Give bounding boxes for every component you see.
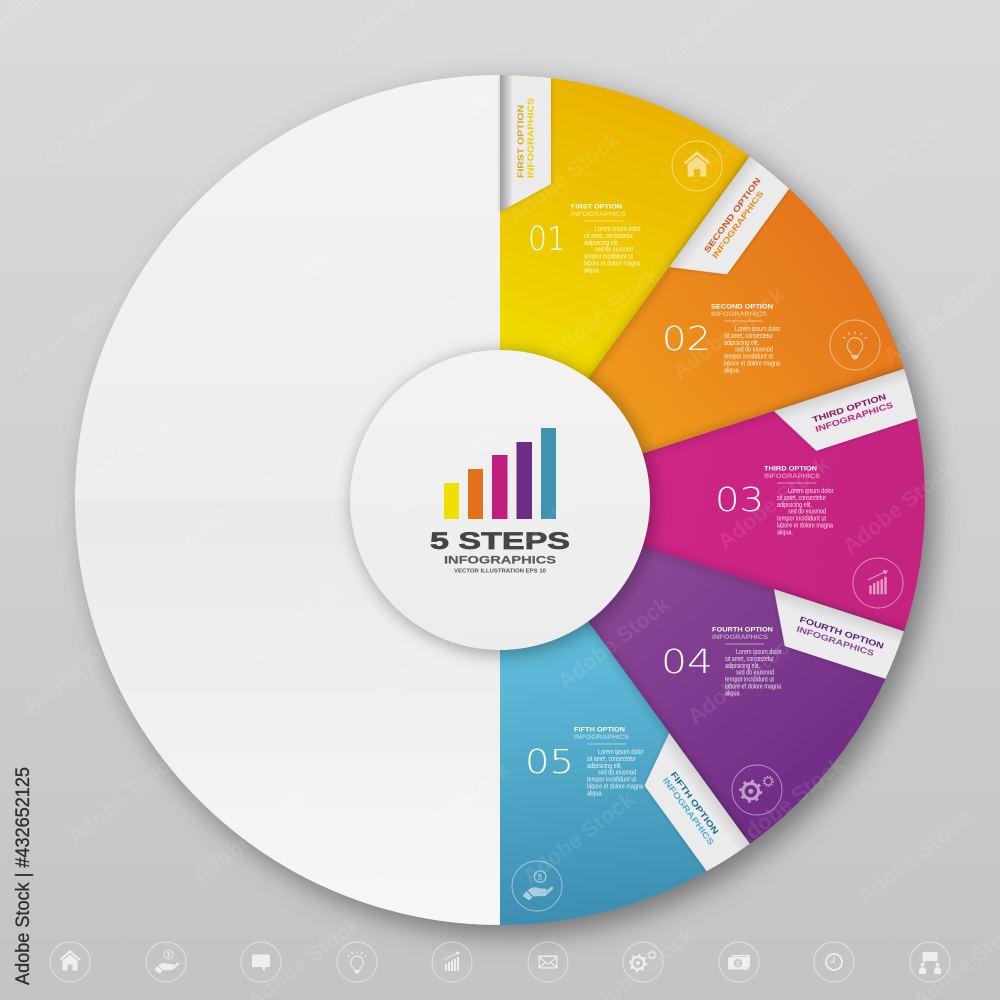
tab: first option: FIRST OPTION	[516, 105, 525, 178]
stock watermarks: Adobe Stock	[223, 581, 345, 684]
tab: first option	[500, 75, 551, 212]
text block: third option: THIRD OPTION	[764, 466, 817, 472]
tab: fourth option: INFOGRAPHICS	[795, 625, 876, 658]
stock watermarks: Adobe Stock	[878, 266, 1000, 369]
text block: fifth option: sit amet, consectetur	[587, 756, 637, 763]
text block: second option	[711, 304, 781, 374]
text block: first option	[571, 204, 641, 274]
number 04: 04	[661, 642, 713, 681]
icon: home	[50, 942, 90, 982]
text block: first option: sit amet, consectetur	[584, 233, 634, 240]
stock watermarks: Adobe Stock	[38, 71, 160, 174]
stock watermarks: Adobe Stock	[513, 451, 635, 554]
icon: banknotes: $	[736, 959, 741, 968]
text block: third option: tempor incididunt ut	[777, 516, 826, 523]
text block: second option: Lorem ipsum dolor	[735, 326, 781, 333]
text block: third option: labore et dolore magna	[777, 522, 833, 530]
stock watermarks: Adobe Stock	[178, 451, 300, 554]
text block: fifth option: FIFTH OPTION	[574, 727, 625, 733]
tab: second option: INFOGRAPHICS	[711, 189, 766, 260]
tab: first option: INFOGRAPHICS	[526, 97, 535, 178]
tab: second option	[669, 156, 790, 276]
text block: first option: tempor incididunt ut	[584, 254, 633, 261]
stock watermarks: Adobe Stock	[213, 246, 335, 349]
text block: fourth option: Lorem ipsum dolor	[736, 649, 782, 656]
text block: fifth option: INFOGRAPHICS	[574, 735, 629, 741]
text block: fifth option: aliqua.	[587, 790, 603, 797]
stock watermarks: Adobe Stock	[683, 626, 805, 729]
icon: people talking	[910, 942, 950, 982]
text block: second option: tempor incididunt ut	[724, 354, 773, 361]
stock watermarks: Adobe Stock	[18, 616, 140, 719]
text block: fourth option: aliqua.	[725, 690, 741, 697]
text block: first option: INFOGRAPHICS	[571, 212, 626, 218]
tab: third option: INFOGRAPHICS	[814, 400, 895, 434]
hub shadow	[351, 351, 655, 655]
text block: first option: adipisicing elit,	[584, 240, 619, 247]
disc drop shadow	[86, 86, 934, 934]
panel: third option segment	[641, 365, 925, 632]
icon: banknotes	[719, 942, 759, 982]
text block: third option: INFOGRAPHICS	[764, 474, 820, 480]
text block: fourth option: tempor incididunt ut	[725, 677, 774, 684]
icon: growth chart	[432, 942, 472, 982]
stock watermarks: Adobe Stock	[188, 786, 310, 889]
icon: hand with coin	[146, 942, 186, 982]
stock watermarks: Adobe Stock	[853, 806, 975, 909]
caption: vector illustration: VECTOR ILLUSTRATION EPS 10	[454, 568, 546, 574]
tab: third option: THIRD OPTION	[811, 392, 887, 425]
tab: fifth option	[644, 733, 750, 872]
text block: second option: SECOND OPTION	[711, 304, 773, 310]
stock id label: Adobe Stock | #432652125	[13, 767, 34, 985]
icon: hand with coin	[512, 861, 562, 911]
icon: light bulb	[830, 320, 880, 370]
subheading: infographics: INFOGRAPHICS	[444, 555, 556, 567]
stock watermarks: Adobe Stock	[383, 421, 505, 524]
text block: second option: adipisicing elit,	[724, 340, 759, 347]
panel: first option segment	[498, 75, 750, 378]
icon row	[50, 942, 950, 982]
stock watermarks: Adobe Stock	[728, 751, 850, 854]
tab: fourth option	[774, 588, 904, 679]
stock watermarks: Adobe Stock	[168, 111, 290, 214]
stock watermarks: Adobe Stock	[393, 756, 515, 859]
text block: fifth option	[574, 727, 644, 797]
number 03: 03	[715, 480, 764, 519]
tab: fourth option: FOURTH OPTION	[798, 615, 885, 651]
text block: fifth option: Lorem ipsum dolor	[598, 749, 644, 756]
tab: fifth option: INFOGRAPHICS	[661, 776, 716, 847]
text block: first option: Lorem ipsum dolor	[595, 226, 641, 233]
heading: 5 steps: 5 STEPS	[430, 528, 570, 555]
text block: fifth option: sed do eiusmod	[598, 770, 636, 777]
text block: fifth option: tempor incididunt ut	[587, 777, 636, 784]
number 05: 05	[525, 742, 574, 781]
text block: first option: labore et dolore magna	[584, 260, 640, 268]
stock watermarks: Adobe Stock	[503, 126, 625, 229]
tab: second option: SECOND OPTION	[702, 176, 763, 254]
text block: fourth option: sit amet, consectetur	[725, 656, 775, 663]
stock watermarks: Adobe Stock	[553, 591, 675, 694]
icon: speech bubble	[241, 942, 281, 982]
text block: fifth option: adipisicing elit,	[587, 763, 622, 770]
text block: third option: aliqua.	[777, 529, 793, 536]
text block: fifth option: labore et dolore magna	[587, 784, 643, 790]
stock watermarks: Adobe Stock	[373, 86, 495, 189]
bar chart	[444, 428, 556, 519]
stock watermarks: Adobe Stock	[348, 621, 470, 724]
text block: third option	[764, 466, 834, 536]
icon: clock	[814, 942, 854, 982]
panel: fifth option segment	[500, 620, 752, 925]
panel: central hub	[350, 350, 650, 650]
icon: growth chart	[853, 558, 903, 608]
text block: fourth option	[712, 627, 782, 697]
stock watermarks: Adobe Stock	[53, 411, 175, 514]
icon: home	[672, 141, 722, 191]
stock watermarks: Adobe Stock	[838, 456, 960, 559]
text block: fourth option: labore et dolore magna	[725, 684, 781, 690]
panel: fourth option segment	[588, 542, 905, 844]
text block: third option: adipisicing elit,	[777, 502, 812, 509]
text block: third option: sed do eiusmod	[788, 509, 826, 516]
text block: fourth option: FOURTH OPTION	[712, 627, 773, 633]
text block: first option: FIRST OPTION	[571, 204, 622, 210]
icon: light bulb	[337, 942, 377, 982]
stock watermarks: Adobe Stock	[828, 111, 950, 214]
icon: envelope	[528, 942, 568, 982]
stock watermarks: Adobe Stock	[8, 281, 130, 384]
text block: second option: INFOGRAPHICS	[711, 312, 767, 318]
text block: second option: aliqua.	[724, 367, 740, 374]
text block: fourth option: INFOGRAPHICS	[712, 635, 768, 641]
number 01: 01	[528, 219, 566, 258]
stock watermarks: Adobe Stock	[713, 451, 835, 554]
text block: third option: Lorem ipsum dolor	[788, 488, 834, 495]
stock watermarks: Adobe Stock	[338, 286, 460, 389]
panel: second option segment	[584, 154, 904, 454]
text block: second option: labore et dolore magna	[724, 360, 780, 368]
stock watermarks: Adobe Stock	[698, 71, 820, 174]
stock watermarks: Adobe Stock	[518, 786, 640, 889]
tab: fifth option: FIFTH OPTION	[669, 770, 720, 836]
text block: second option: sed do eiusmod	[735, 347, 773, 354]
icon: hand with coin: $	[167, 952, 171, 959]
icon: hand with coin: $	[538, 873, 543, 882]
stock watermarks: Adobe Stock	[543, 261, 665, 364]
text block: fourth option: sed do eiusmod	[736, 670, 774, 677]
text block: third option: sit amet, consectetur	[777, 495, 827, 502]
text block: first option: sed do eiusmod	[595, 247, 633, 254]
icon: gears	[732, 765, 782, 815]
icon: gears	[623, 942, 663, 982]
stock watermarks: Adobe Stock	[668, 281, 790, 384]
text block: fourth option: adipisicing elit,	[725, 663, 760, 670]
text block: second option: sit amet, consectetur	[724, 333, 774, 340]
panel: blank left half of the wheel	[75, 75, 500, 925]
text block: first option: aliqua.	[584, 267, 600, 274]
number 02: 02	[662, 319, 711, 358]
tab: third option	[774, 369, 920, 460]
stock watermarks: Adobe Stock	[63, 746, 185, 849]
